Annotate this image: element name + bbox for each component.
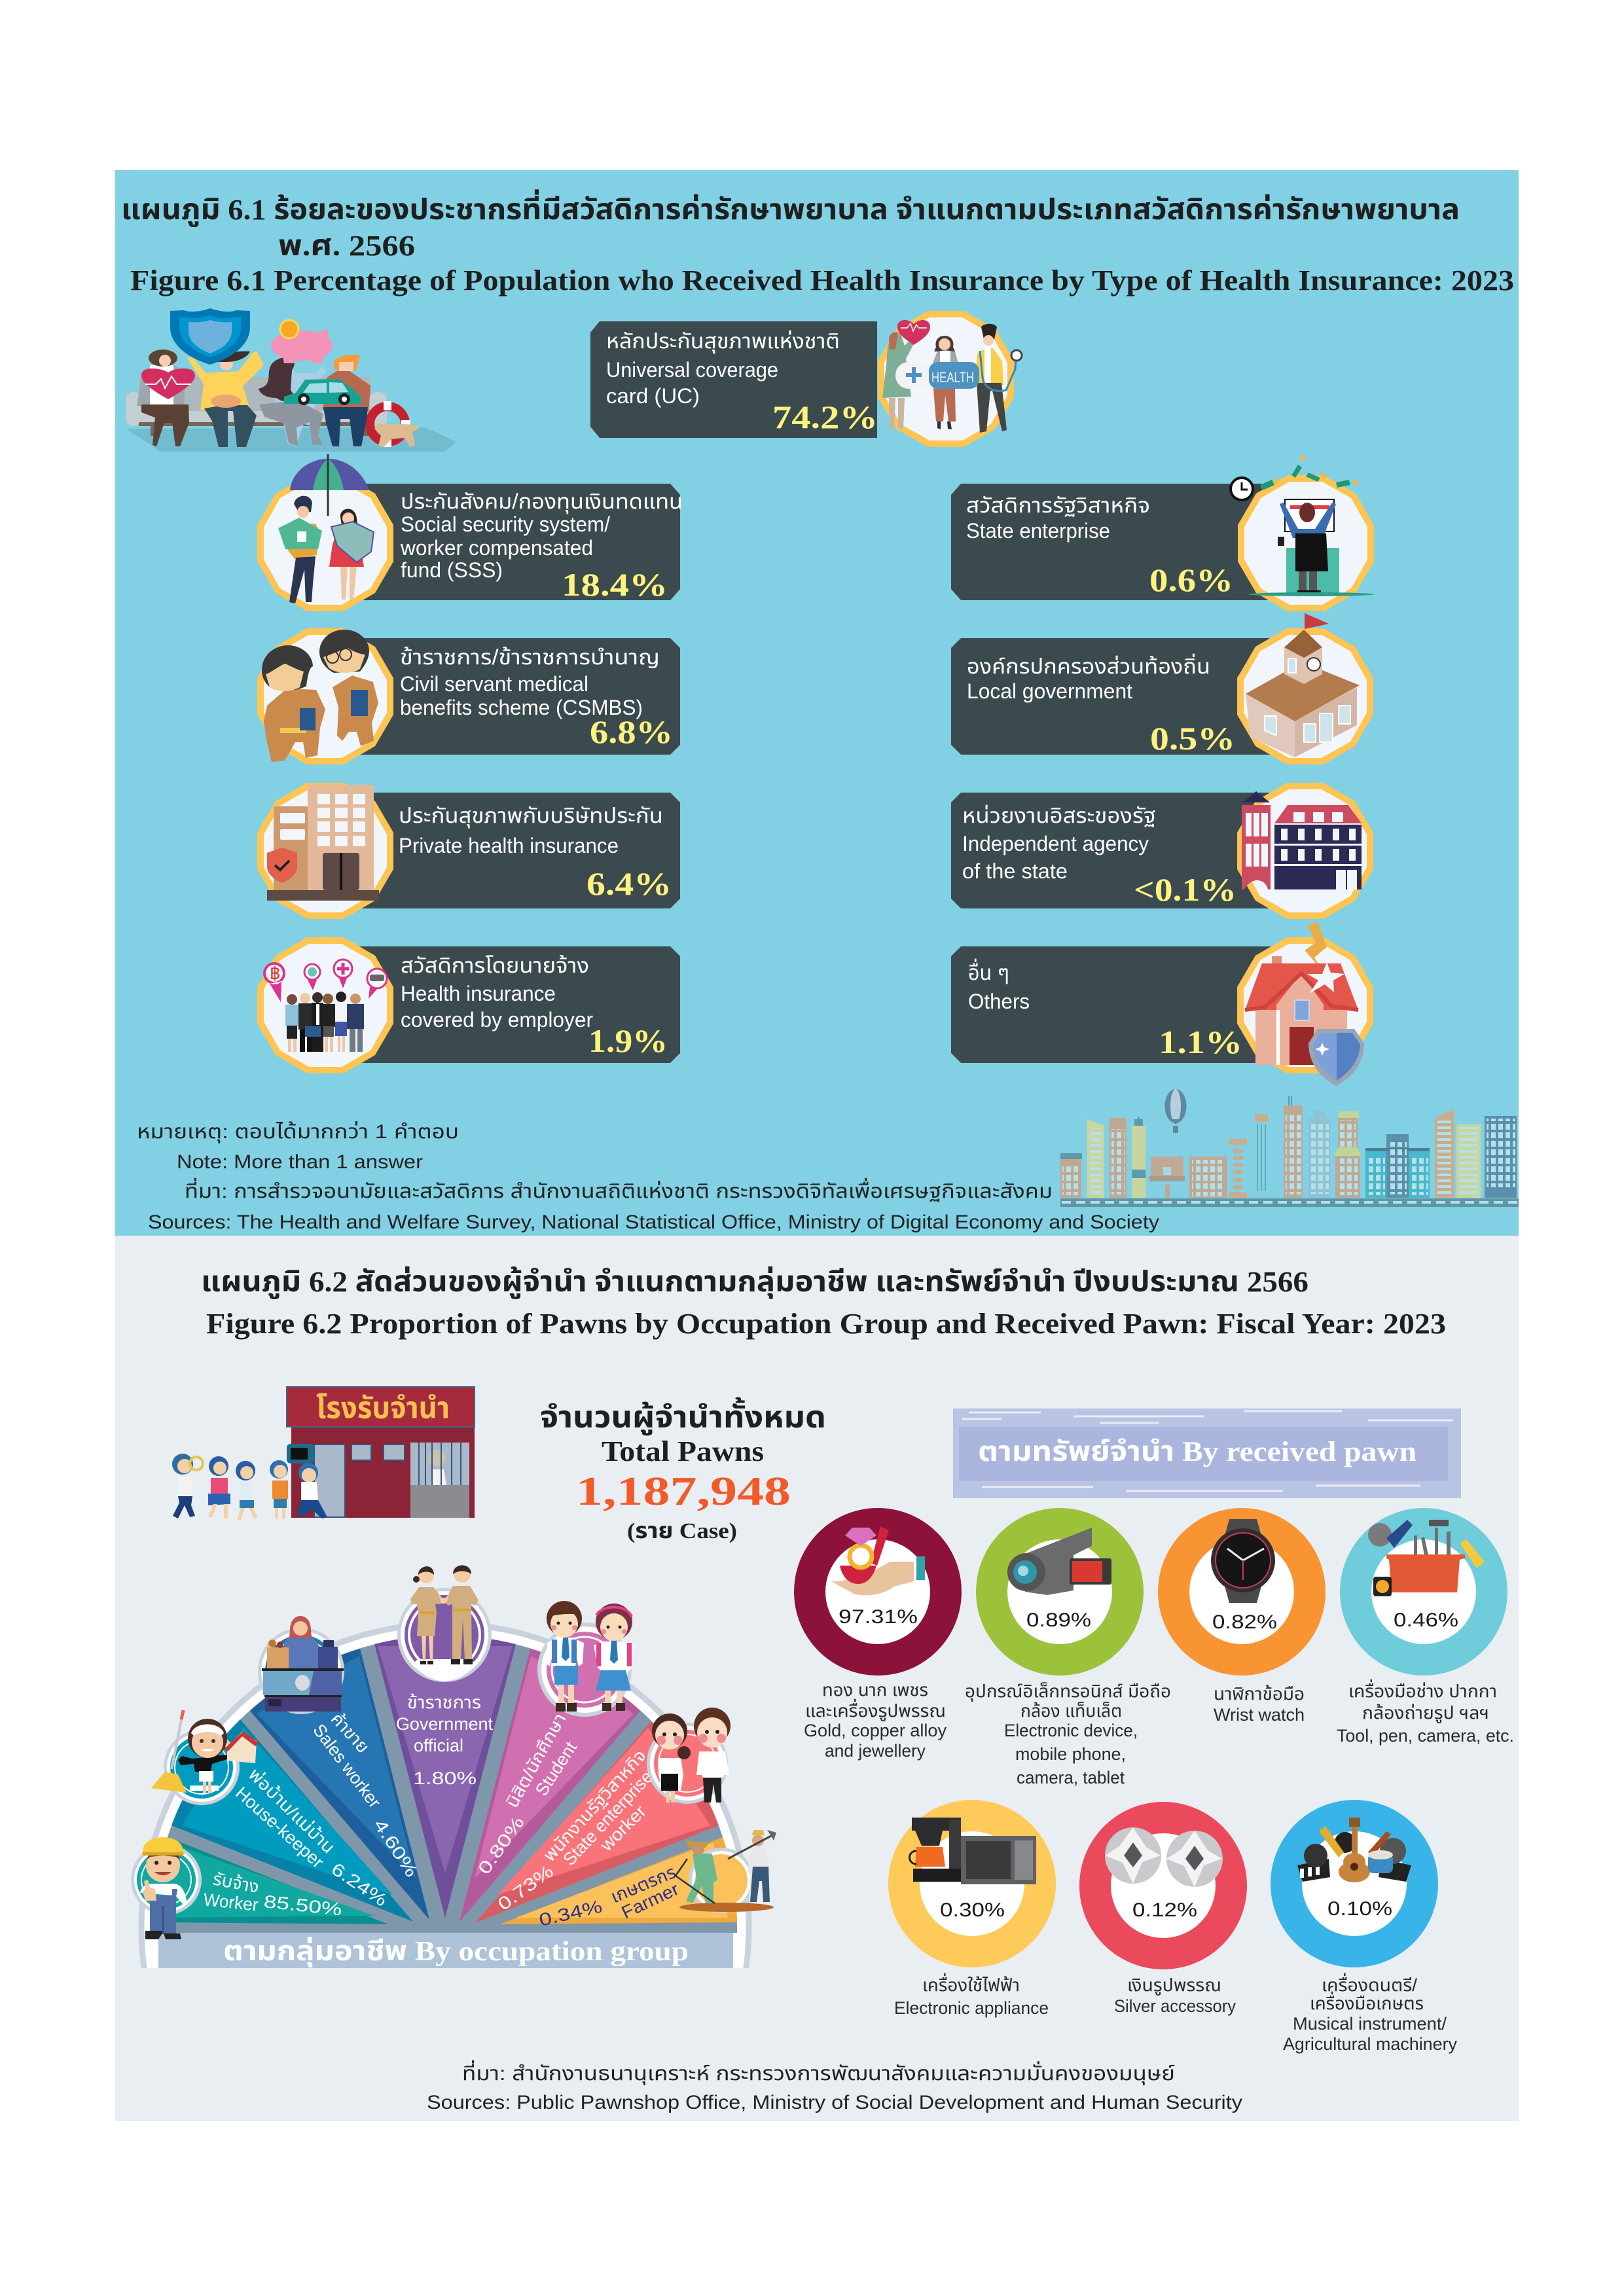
banner: social security 18.4%: worker compensated: [400, 536, 593, 560]
fan labels: 0.73%: [494, 1861, 557, 1914]
fan labels: 0.34%: [537, 1897, 604, 1930]
banner: universal coverage 74.2%: หลักประกันสุขภาพแห่งชาติ: [606, 329, 840, 353]
donut: tools 0.46%: กล้องถ่ายรูป ฯลฯ: [1362, 1703, 1489, 1723]
banner: others 1.1%: อื่น ๆ: [968, 958, 1009, 984]
donut: electronic appliance 0.30%: เครื่องใช้ไฟฟ้า: [922, 1973, 1020, 1995]
banner: civil servant 6.8%: ข้าราชการ/ข้าราชการบำนาญ: [400, 645, 660, 669]
banner: state enterprise 0.6%: 0.6%: [1149, 562, 1233, 598]
notes and sources of figure 6.1: [137, 1121, 1159, 1233]
total pawns 1,187,948: Total Pawns: [602, 1435, 764, 1467]
banner: independent agency under 0.1%: [951, 783, 1373, 919]
sources of figure 6.2: [427, 2060, 1242, 2113]
banner: independent agency under 0.1%: <0.1%: [1134, 871, 1236, 908]
donut: electronic device 0.89%: Electronic device,: [1004, 1721, 1138, 1740]
donut: electronic appliance 0.30%: Electronic appliance: [894, 1998, 1049, 2018]
banner: local government 0.5%: องค์กรปกครองส่วนท้องถิ่น: [967, 653, 1210, 678]
icon: office worker at desk: [1231, 456, 1374, 611]
donut: wrist watch 0.82%: นาฬิกาข้อมือ: [1214, 1684, 1305, 1704]
icon: pawnshop with queue of people: โรงรับจำนำ: [316, 1391, 450, 1425]
banner: social security 18.4%: [257, 454, 683, 611]
banner: social security 18.4%: Social security system/: [401, 512, 610, 536]
icon: family on sofa with shield, piggy bank and car: [126, 308, 456, 452]
banner: others 1.1%: Others: [968, 990, 1030, 1013]
donut: electronic device 0.89%: mobile phone,: [1015, 1744, 1126, 1764]
icon: pawnshop with queue of people: [172, 1387, 475, 1520]
icon: agency buildings: [1237, 783, 1373, 919]
icon: students: [537, 1601, 634, 1717]
donut: tools 0.46%: 0.46%: [1394, 1609, 1458, 1631]
icon: diamond earrings: [1105, 1827, 1223, 1887]
fan labels: 4.60%: [370, 1816, 422, 1880]
donut: musical instrument 0.10%: Musical instrument/: [1293, 2014, 1447, 2034]
donut: gold 97.31%: Gold, copper alloy: [804, 1721, 947, 1740]
icon: house with lightning and shield: [1237, 922, 1373, 1086]
banner: social security 18.4%: ประกันสังคม/กองทุนเงินทดแทน: [401, 490, 683, 514]
icon: state enterprise workers: [647, 1708, 731, 1804]
heading: figure 6.2: แผนภูมิ 6.2 สัดส่วนของผู้จำนำ จำแนกตามกลุ่มอาชีพ และทรัพย์จำนำ ปีงบประมาณ 2566: [201, 1266, 1308, 1299]
banner: state enterprise 0.6%: [951, 456, 1374, 611]
icon: employees with benefit bubbles: [257, 937, 393, 1073]
donut: wrist watch 0.82%: Wrist watch: [1214, 1705, 1305, 1725]
total pawns 1,187,948: 1,187,948: [576, 1469, 791, 1514]
heading: figure 6.2: [201, 1266, 1446, 1340]
donut: silver accessory 0.12%: เงินรูปพรรณ: [1127, 1975, 1221, 1996]
fan labels: House-keeper: [232, 1783, 327, 1872]
banner: by received pawn: [953, 1408, 1461, 1498]
sources of figure 6.2: ที่มา: สำนักงานธนานุเคราะห์ กระทรวงการพัฒนาสังคมและความมั่นคงของมนุษย์: [462, 2060, 1175, 2085]
icon: toolbox: [1368, 1520, 1485, 1596]
banner: private insurance 6.4%: [257, 783, 680, 919]
banner: local government 0.5%: 0.5%: [1150, 720, 1235, 757]
banner: local government 0.5%: [951, 613, 1373, 764]
banner: employer coverage 1.9%: Health insurance: [401, 982, 556, 1005]
sources of figure 6.2: Sources: Public Pawnshop Office, Ministry of Social Development and Human Security: [427, 2092, 1242, 2113]
banner: others 1.1%: [951, 922, 1373, 1086]
banner: employer coverage 1.9%: [257, 937, 680, 1073]
donut: silver accessory 0.12%: [1079, 1802, 1247, 2016]
heading: figure 6.1: [121, 189, 1514, 296]
fan labels: พ่อบ้าน/แม่บ้าน: [245, 1765, 339, 1857]
fan labels: 1.80%: [413, 1768, 477, 1788]
banner: independent agency under 0.1%: of the state: [962, 859, 1068, 883]
icon: government officials: [397, 1566, 492, 1682]
fan labels: Student: [532, 1738, 581, 1799]
icon: health team: [878, 311, 1022, 447]
banner: universal coverage 74.2%: [590, 311, 1022, 447]
fan labels: ข้าราชการ: [407, 1693, 481, 1712]
banner: social security 18.4%: fund (SSS): [401, 558, 503, 582]
icon: camcorder: [1007, 1528, 1111, 1595]
fan labels: รับจ้าง: [211, 1869, 261, 1897]
donut: tools 0.46%: Tool, pen, camera, etc.: [1337, 1726, 1514, 1746]
icon: town hall: [1237, 613, 1373, 764]
fan labels: Farmer: [619, 1879, 682, 1922]
fan labels: พนักงานรัฐวิสาหกิจ: [539, 1746, 650, 1865]
heading: figure 6.2: Figure 6.2 Proportion of Pawns by Occupation Group and Received Pawn: Fiscal Year: 2023: [206, 1308, 1446, 1340]
fan labels: worker: [596, 1801, 650, 1856]
banner: civil servant 6.8%: Civil servant medical: [400, 672, 588, 696]
notes and sources of figure 6.1: Note: More than 1 answer: [177, 1151, 423, 1173]
banner: local government 0.5%: Local government: [967, 679, 1132, 703]
icon: civil servants: [257, 628, 393, 764]
icon: farmers: [676, 1830, 776, 1913]
total pawns 1,187,948: (ราย Case): [627, 1519, 737, 1543]
panel: figure 6.1 health insurance: [115, 170, 1519, 1236]
fan labels: official: [414, 1736, 463, 1755]
banner: employer coverage 1.9%: สวัสดิการโดยนายจ้าง: [401, 954, 589, 977]
fan labels: 85.50%: [262, 1892, 343, 1920]
fan labels: นิสิต/นักศึกษา: [502, 1710, 570, 1811]
icon: musical instruments: [1297, 1818, 1411, 1882]
icon: employees with benefit bubbles: ฿: [270, 963, 280, 984]
heading: figure 6.1: พ.ศ. 2566: [278, 230, 415, 262]
icon: city skyline: [1060, 1089, 1519, 1207]
donut: tools 0.46%: เครื่องมือช่าง ปากกา: [1348, 1679, 1497, 1701]
fan labels: State enterprise: [559, 1767, 657, 1869]
fan labels: เกษตรกร: [608, 1862, 679, 1907]
heading: figure 6.1: Figure 6.1 Percentage of Population who Received Health Insurance by Type of Health Insurance: 2023: [130, 264, 1514, 296]
label band: by occupation group: ตามกลุ่มอาชีพ By occupation group: [223, 1936, 689, 1967]
total pawns 1,187,948: [540, 1397, 826, 1543]
banner: employer coverage 1.9%: covered by employer: [401, 1008, 593, 1031]
donut: electronic device 0.89%: 0.89%: [1026, 1609, 1091, 1631]
donut: gold 97.31%: and jewellery: [825, 1741, 926, 1761]
fan labels: 0.80%: [474, 1812, 528, 1878]
icon: couple under umbrella: [257, 454, 393, 611]
banner: employer coverage 1.9%: 1.9%: [588, 1022, 668, 1059]
donut: tools 0.46%: [1337, 1508, 1514, 1746]
donut: wrist watch 0.82%: [1158, 1508, 1326, 1725]
fan labels: ค้าขาย: [327, 1709, 373, 1757]
donut: electronic device 0.89%: อุปกรณ์อิเล็กทรอนิกส์ มือถือ: [965, 1681, 1171, 1702]
wedge: state enterprise worker: [475, 1721, 719, 1923]
banner: civil servant 6.8%: 6.8%: [590, 713, 673, 750]
donut: electronic device 0.89%: camera, tablet: [1017, 1768, 1125, 1787]
wedge: sales worker: [250, 1649, 429, 1920]
banner: civil servant 6.8%: benefits scheme (CSMBS): [400, 696, 643, 719]
banner: state enterprise 0.6%: State enterprise: [966, 519, 1110, 543]
fan labels: [202, 1693, 682, 1930]
fan labels: Worker: [202, 1890, 259, 1915]
icon: health team: HEALTH: [931, 369, 974, 386]
icon: hand with ring: [831, 1526, 925, 1595]
notes and sources of figure 6.1: หมายเหตุ: ตอบได้มากกว่า 1 คำตอบ: [137, 1121, 459, 1143]
donut: electronic appliance 0.30%: 0.30%: [940, 1899, 1005, 1921]
banner: social security 18.4%: 18.4%: [562, 566, 668, 603]
banner: universal coverage 74.2%: card (UC): [606, 384, 700, 408]
banner: private insurance 6.4%: Private health insurance: [399, 834, 619, 857]
wedge: worker: [153, 1837, 388, 1924]
donut: electronic device 0.89%: กล้อง แท็บเล็ต: [1020, 1701, 1122, 1721]
wedge: government official: [374, 1636, 516, 1918]
notes and sources of figure 6.1: ที่มา: การสำรวจอนามัยและสวัสดิการ สำนักงานสถิติแห่งชาติ กระทรวงดิจิทัลเพื่อเศรษฐกิจและสังคม: [185, 1177, 1053, 1202]
icon: office building: [257, 783, 393, 919]
chart: occupation fan: [131, 1566, 776, 1968]
donut: musical instrument 0.10%: [1271, 1800, 1457, 2054]
donut: musical instrument 0.10%: เครื่องมือเกษตร: [1310, 1991, 1424, 2013]
banner: private insurance 6.4%: 6.4%: [586, 865, 672, 902]
banner: by received pawn: ตามทรัพย์จำนำ By received pawn: [978, 1437, 1416, 1467]
panel: figure 6.2 pawns: [115, 1236, 1519, 2121]
donut: gold 97.31%: ทอง นาก เพชร: [822, 1680, 928, 1700]
banner: universal coverage 74.2%: 74.2%: [772, 399, 878, 435]
fan labels: Government: [396, 1714, 493, 1734]
banner: others 1.1%: 1.1%: [1159, 1024, 1242, 1060]
banner: independent agency under 0.1%: Independent agency: [962, 832, 1149, 855]
heading: figure 6.1: แผนภูมิ 6.1 ร้อยละของประชากรที่มีสวัสดิการค่ารักษาพยาบาล จำแนกตามประเภทสวัสดิการค่ารักษาพยาบาล: [121, 189, 1460, 227]
donut: gold 97.31%: 97.31%: [839, 1606, 918, 1628]
donut: musical instrument 0.10%: เครื่องดนตรี/: [1322, 1973, 1418, 1995]
notes and sources of figure 6.1: Sources: The Health and Welfare Survey, National Statistical Office, Ministry of Digital Economy and Society: [148, 1211, 1159, 1233]
fan labels: 6.24%: [328, 1859, 391, 1910]
banner: civil servant 6.8%: [257, 628, 680, 764]
donut: musical instrument 0.10%: 0.10%: [1327, 1898, 1392, 1920]
fan labels: Sales worker: [309, 1721, 385, 1812]
donut: electronic appliance 0.30%: [888, 1800, 1056, 2018]
banner: independent agency under 0.1%: หน่วยงานอิสระของรัฐ: [962, 804, 1156, 827]
banner: private insurance 6.4%: ประกันสุขภาพกับบริษัทประกัน: [399, 804, 663, 828]
icon: sales worker at counter: [258, 1616, 344, 1714]
donut: silver accessory 0.12%: 0.12%: [1132, 1899, 1197, 1921]
donut: gold 97.31%: และเครื่องรูปพรรณ: [805, 1698, 946, 1721]
donut: gold 97.31%: [794, 1508, 962, 1761]
wedge: student: [460, 1649, 640, 1922]
donut: wrist watch 0.82%: 0.82%: [1212, 1611, 1277, 1633]
donut: musical instrument 0.10%: Agricultural machinery: [1283, 2034, 1457, 2054]
donut: silver accessory 0.12%: Silver accessory: [1114, 1996, 1236, 2016]
icon: coffee maker and microwave: [910, 1818, 1036, 1884]
wedge: farmer: [500, 1837, 737, 1924]
icon: wrist watch: [1211, 1519, 1275, 1603]
total pawns 1,187,948: จำนวนผู้จำนำทั้งหมด: [540, 1397, 826, 1435]
banner: universal coverage 74.2%: Universal coverage: [606, 358, 778, 382]
donut: electronic device 0.89%: [965, 1508, 1171, 1787]
wedge: housekeeper: [171, 1719, 413, 1922]
icon: housekeeper with broom: [151, 1710, 259, 1805]
banner: state enterprise 0.6%: สวัสดิการรัฐวิสาหกิจ: [966, 493, 1150, 517]
icon: worker thumbs up: [131, 1837, 202, 1939]
